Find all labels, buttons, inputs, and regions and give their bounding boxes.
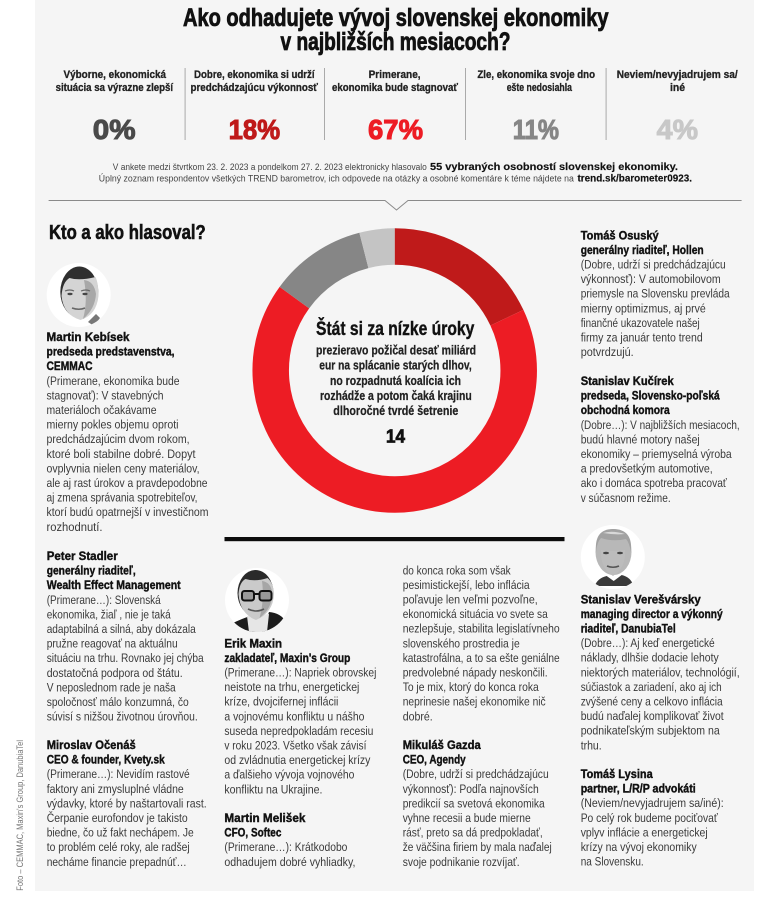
person: Erik Maxin: kríze, dvojcifernej inflácii: [224, 695, 338, 709]
person: Erik Maxin: suseda nepredpokladám recesiu: [224, 724, 373, 738]
answer: Zle 11%: ešte nedosiahla: [507, 82, 573, 94]
title: [183, 4, 609, 56]
person: Martin Kebísek: rozhodnutí.: [46, 520, 102, 534]
person: Peter Stadler: [47, 549, 204, 724]
person: Peter Stadler: adaptabilná a silná, aby dokázala: [47, 622, 196, 636]
person: Tomáš Osuský: priemysle na Slovensku prevláda: [581, 287, 730, 301]
person: Stanislav Kučírek: ako i domáca spotreba pracovať: [581, 476, 727, 490]
person: Tomáš Osuský: generálny riaditeľ, Hollen: [581, 243, 704, 257]
person: Stanislav Verešvársky: zvýšené ceny a celkovo inflácia: [581, 694, 723, 708]
answer: Dobre 18%: [190, 69, 319, 145]
portrait: Martin Kebísek: [47, 263, 111, 327]
person: Miroslav Očenáš: biedne, čo už fakt nechápem. Je: [47, 826, 194, 840]
person: Mikuláš Gazda: že väčšina firiem by mala naďalej: [403, 840, 552, 854]
person: Stanislav Verešvársky: [581, 592, 740, 752]
person: Erik Maxin: (Primerane…): Napriek obrovskej: [224, 666, 376, 680]
person: Mikuláš Gazda: (Dobre, udrží si predchádzajúcu: [403, 767, 549, 781]
person: Tomáš Osuský: firmy za január tento trend: [581, 330, 703, 344]
person: Stanislav Verešvársky: náklady, dlhšie dodacie lehoty: [581, 651, 719, 665]
person: Stanislav Kučírek: predseda, Slovensko-poľská: [581, 389, 720, 403]
person: Stanislav Verešvársky: (Dobre…): Aj keď energetické: [581, 636, 715, 650]
person: Martin Melišek: ekonomická situácia vo svete sa: [403, 607, 548, 621]
answer: Primerane 67%: ekonomika bude stagnovať: [332, 82, 459, 94]
survey note: Úplný zoznam respondentov všetkých TREND barometrov, ich odpovede na otázky a osobné komentáre k téme nájdete na: [99, 174, 574, 184]
person: Martin Melišek: poľavuje len veľmi pozvoľne,: [403, 592, 538, 606]
title: Ako odhadujete vývoj slovenskej ekonomiky: [183, 4, 609, 32]
answer: Výborne 0%: 0%: [93, 114, 136, 145]
segment: Dobre 18%: [395, 246, 507, 318]
person: Martin Kebísek: [46, 330, 208, 534]
person: Miroslav Očenáš: to problém celé roky, ale radšej: [47, 840, 190, 854]
person: Erik Maxin: konfliktu na Ukrajine.: [224, 782, 322, 796]
person: Tomáš Osuský: potvrdzujú.: [581, 345, 634, 359]
person: Mikuláš Gazda: vyhne recesii a bude mierne: [403, 811, 531, 825]
portrait: Stanislav Verešvársky: [581, 525, 645, 589]
thick black rule: [224, 537, 564, 541]
person: Miroslav Očenáš: výdavky, ktoré by naštartovali rast.: [47, 796, 207, 810]
person: Martin Kebísek: mierny pokles objemu oproti: [46, 418, 178, 432]
person: Tomáš Lysina: krízy na vývoj ekonomiky: [581, 840, 697, 854]
person: Martin Melišek: neprinesie našej ekonomike nič: [403, 695, 546, 709]
person: Tomáš Lysina: na Slovensku.: [581, 855, 644, 869]
person: Tomáš Osuský: finančné ukazovatele našej: [581, 316, 700, 330]
photo credit: Foto – CEMMAC, Maxin's Group, DanubiaTel: [15, 740, 25, 891]
person: Mikuláš Gazda: svoje podnikanie rozvíjať.: [403, 855, 520, 869]
person: Peter Stadler: spoločnosť málo konzumná, čo: [47, 695, 189, 709]
person: Stanislav Kučírek: Stanislav Kučírek: [581, 374, 674, 388]
donut center text: prezieravo požičal desať miliárd: [316, 344, 476, 358]
person: Martin Melišek: To je mix, ktorý do konca roka: [403, 680, 539, 694]
person: Miroslav Očenáš: Miroslav Očenáš: [47, 738, 136, 752]
person: Martin Kebísek: aj zmena správania spotrebiteľov,: [46, 491, 198, 505]
person: Stanislav Verešvársky: podnikateľským subjektom na: [581, 724, 720, 738]
segment: Primerane 67%: [271, 298, 519, 495]
answer: Zle 11%: Zle, ekonomika svoje dno: [477, 69, 595, 81]
person: Martin Kebísek: (Primerane, ekonomika bude: [46, 374, 180, 388]
person: Erik Maxin: od zvládnutia energetickej krízy: [224, 753, 371, 767]
answer: Dobre 18%: 18%: [229, 114, 280, 145]
donut center text: [316, 318, 476, 447]
person: Miroslav Očenáš: (Primerane…): Nevidím rastové: [47, 767, 190, 781]
person: Stanislav Kučírek: ekonomiky – priemyselná výroba: [581, 447, 732, 461]
person: Tomáš Lysina: Po celý rok budeme pociťovať: [581, 811, 718, 825]
person: Martin Melišek: [224, 563, 560, 869]
person: Erik Maxin: a ďalšieho vývoja vojnového: [224, 768, 354, 782]
person: Erik Maxin: a vojnovému konfliktu u nášho: [224, 709, 364, 723]
person: Stanislav Kučírek: a predovšetkým automotive,: [581, 462, 713, 476]
person: Tomáš Osuský: (Dobre, udrží si predchádzajúcu: [581, 258, 726, 272]
person: Miroslav Očenáš: [47, 738, 207, 869]
person: Martin Kebísek: predchádzajúcim dvom rokom,: [46, 432, 190, 446]
person: Peter Stadler: V neposlednom rade je naša: [47, 680, 176, 694]
person: Martin Kebísek: ale aj rast úrokov a pravdepodobne: [46, 476, 208, 490]
answer: Primerane 67%: Primerane,: [369, 69, 421, 81]
donut center text: 14: [386, 426, 406, 447]
answer: Dobre 18%: predchádzajúcu výkonnosť: [190, 82, 319, 94]
person: Peter Stadler: ekonomika, žiaľ , nie je taká: [47, 607, 171, 621]
survey note: V ankete medzi štvrtkom 23. 2. 2023 a pondelkom 27. 2. 2023 elektronicky hlasovalo: [113, 162, 427, 173]
person: Stanislav Verešvársky: Stanislav Verešvársky: [581, 592, 701, 606]
person: Tomáš Osuský: Tomáš Osuský: [581, 228, 659, 242]
donut center text: Štát si za nízke úroky: [316, 318, 475, 340]
person: Martin Melišek: (Primerane…): Krátkodobo: [224, 840, 347, 854]
donut center text: rozhádže a potom čaká krajinu: [320, 389, 472, 403]
person: Peter Stadler: generálny riaditeľ,: [47, 564, 136, 578]
person: Miroslav Očenáš: faktory ani zmysluplné vládne: [47, 782, 184, 796]
person: Mikuláš Gazda: Mikuláš Gazda: [403, 738, 481, 752]
person: Tomáš Lysina: partner, L/R/P advokáti: [581, 782, 696, 796]
person: Miroslav Očenáš: Čerpanie eurofondov je takisto: [47, 810, 188, 825]
person: Tomáš Lysina: [581, 767, 724, 869]
person: Martin Melišek: pesimistickejší, lebo inflácia: [403, 578, 530, 592]
answer: Výborne 0%: [56, 69, 174, 145]
person: Martin Kebísek: predseda predstavenstva,: [46, 345, 174, 359]
survey note: [99, 162, 692, 184]
person: Stanislav Kučírek: budú hlavné motory našej: [581, 432, 700, 446]
portrait: Erik Maxin: [225, 568, 289, 632]
person: Martin Melišek: odhadujem dobré vyhliadky,: [224, 855, 355, 869]
person: Peter Stadler: dostatočná podpora od štátu.: [47, 666, 183, 680]
person: Miroslav Očenáš: necháme financie prepadnúť…: [47, 855, 187, 869]
answer: Neviem 4%: 4%: [657, 114, 698, 145]
person: Stanislav Verešvársky: súčiastok a zariadení, ako aj ich: [581, 680, 722, 694]
segment: Zle 11%: [294, 250, 364, 298]
answer: Výborne 0%: Výborne, ekonomická: [64, 69, 167, 81]
person: Tomáš Lysina: (Neviem/nevyjadrujem sa/iné):: [581, 796, 724, 810]
person: Stanislav Kučírek: obchodná komora: [581, 403, 670, 417]
person: Martin Melišek: dobré.: [403, 709, 433, 723]
person: Peter Stadler: pružne reagovať na aktuálnu: [47, 637, 178, 651]
person: Martin Melišek: CFO, Softec: [224, 826, 281, 840]
person: Mikuláš Gazda: výkonnosť): Podľa najnovších: [403, 782, 539, 796]
donut center text: no rozpadnutá koalícia ich: [330, 374, 461, 388]
person: Mikuláš Gazda: rásť, preto sa dá predpokladať,: [403, 826, 543, 840]
person: Martin Melišek: Martin Melišek: [224, 811, 305, 825]
answer: Dobre 18%: Dobre, ekonomika si udrží: [194, 69, 315, 81]
person: Peter Stadler: situáciu na trhu. Rovnako jej chýba: [47, 651, 204, 665]
donut center text: dlhoročné tvrdé šetrenie: [333, 404, 458, 418]
title: v najbližších mesiacoch?: [280, 28, 510, 56]
answer: Primerane 67%: 67%: [368, 114, 423, 145]
answer: Výborne 0%: situácia sa výrazne zlepší: [56, 82, 174, 94]
person: Mikuláš Gazda: CEO, Agendy: [403, 753, 466, 767]
answer: Zle 11%: 11%: [513, 114, 559, 145]
person: Erik Maxin: v roku 2023. Všetko však závisí: [224, 738, 367, 752]
person: Mikuláš Gazda: [403, 738, 552, 869]
person: Martin Melišek: katastrofálna, a to sa ešte geniálne: [403, 651, 560, 665]
person: Erik Maxin: zakladateľ, Maxin's Group: [224, 651, 351, 665]
person: Tomáš Lysina: Tomáš Lysina: [581, 767, 653, 781]
answer: Primerane 67%: [332, 69, 459, 145]
divider arrow: [49, 200, 742, 210]
person: Peter Stadler: Wealth Effect Management: [47, 578, 181, 592]
segment: Neviem 4%: [364, 246, 395, 250]
answer: Neviem 4%: iné: [670, 82, 685, 94]
answer: Zle 11%: [477, 69, 595, 145]
person: Martin Kebísek: CEMMAC: [46, 359, 93, 373]
person: Martin Kebísek: ktorí budú opatrnejší v investičnom: [46, 505, 208, 519]
person: Martin Kebísek: stagnovať): V stavebných: [46, 388, 164, 402]
survey note: 55 vybraných osobností slovenskej ekonomiky.: [430, 162, 678, 173]
person: Martin Kebísek: ktoré boli stabilne dobré. Dopyt: [46, 447, 196, 461]
person: Martin Melišek: predvolebné nápady neskončili.: [403, 666, 548, 680]
person: Martin Melišek: do konca roka som však: [403, 563, 511, 577]
person: Tomáš Osuský: výkonnosť): V automobilovom: [581, 272, 721, 286]
person: Tomáš Osuský: mierny optimizmus, aj prvé: [581, 301, 706, 315]
person: Stanislav Kučírek: [581, 374, 740, 505]
person: Stanislav Verešvársky: budú naďalej komplikovať život: [581, 709, 724, 723]
person: Martin Kebísek: Martin Kebísek: [46, 330, 130, 344]
person: Martin Kebísek: materiáloch očakávame: [46, 403, 157, 417]
person: Martin Kebísek: ovplyvnia nielen ceny materiálov,: [46, 461, 200, 475]
person: Miroslav Očenáš: CEO & founder, Kvety.sk: [47, 753, 165, 767]
person: Peter Stadler: (Primerane…): Slovenská: [47, 593, 161, 607]
person: Martin Melišek: nezlepšuje, stabilita legislatívneho: [403, 622, 560, 636]
person: Tomáš Osuský: [581, 228, 730, 359]
section heading: Kto a ako hlasoval?: [49, 221, 206, 244]
donut center text: eur na splácanie starých dlhov,: [319, 359, 472, 373]
person: Stanislav Verešvársky: managing director a výkonný: [581, 607, 723, 621]
person: Stanislav Kučírek: v súčasnom režime.: [581, 491, 671, 505]
person: Stanislav Verešvársky: trhu.: [581, 738, 602, 752]
person: Erik Maxin: Erik Maxin: [224, 636, 282, 650]
person: Stanislav Verešvársky: riaditeľ, DanubiaTel: [581, 622, 676, 636]
person: Stanislav Verešvársky: niektorých materiálov, technológií,: [581, 665, 740, 679]
person: Erik Maxin: neistote na trhu, energetickej: [224, 680, 359, 694]
person: Mikuláš Gazda: predikcií sa svetová ekonomika: [403, 796, 545, 810]
poll results row: [56, 68, 738, 145]
person: Erik Maxin: [224, 636, 376, 796]
survey note: trend.sk/barometer0923.: [578, 174, 692, 184]
person: Martin Melišek: slovenského prostredia je: [403, 636, 520, 650]
answer: Neviem 4%: [617, 69, 738, 145]
donut chart: [271, 246, 519, 495]
person: Peter Stadler: súvisí s nižšou životnou úrovňou.: [47, 710, 198, 724]
answer: Neviem 4%: Neviem/nevyjadrujem sa/: [617, 69, 738, 81]
person: Tomáš Lysina: vplyv inflácie a energetickej: [581, 825, 708, 839]
person: Peter Stadler: Peter Stadler: [47, 549, 118, 563]
